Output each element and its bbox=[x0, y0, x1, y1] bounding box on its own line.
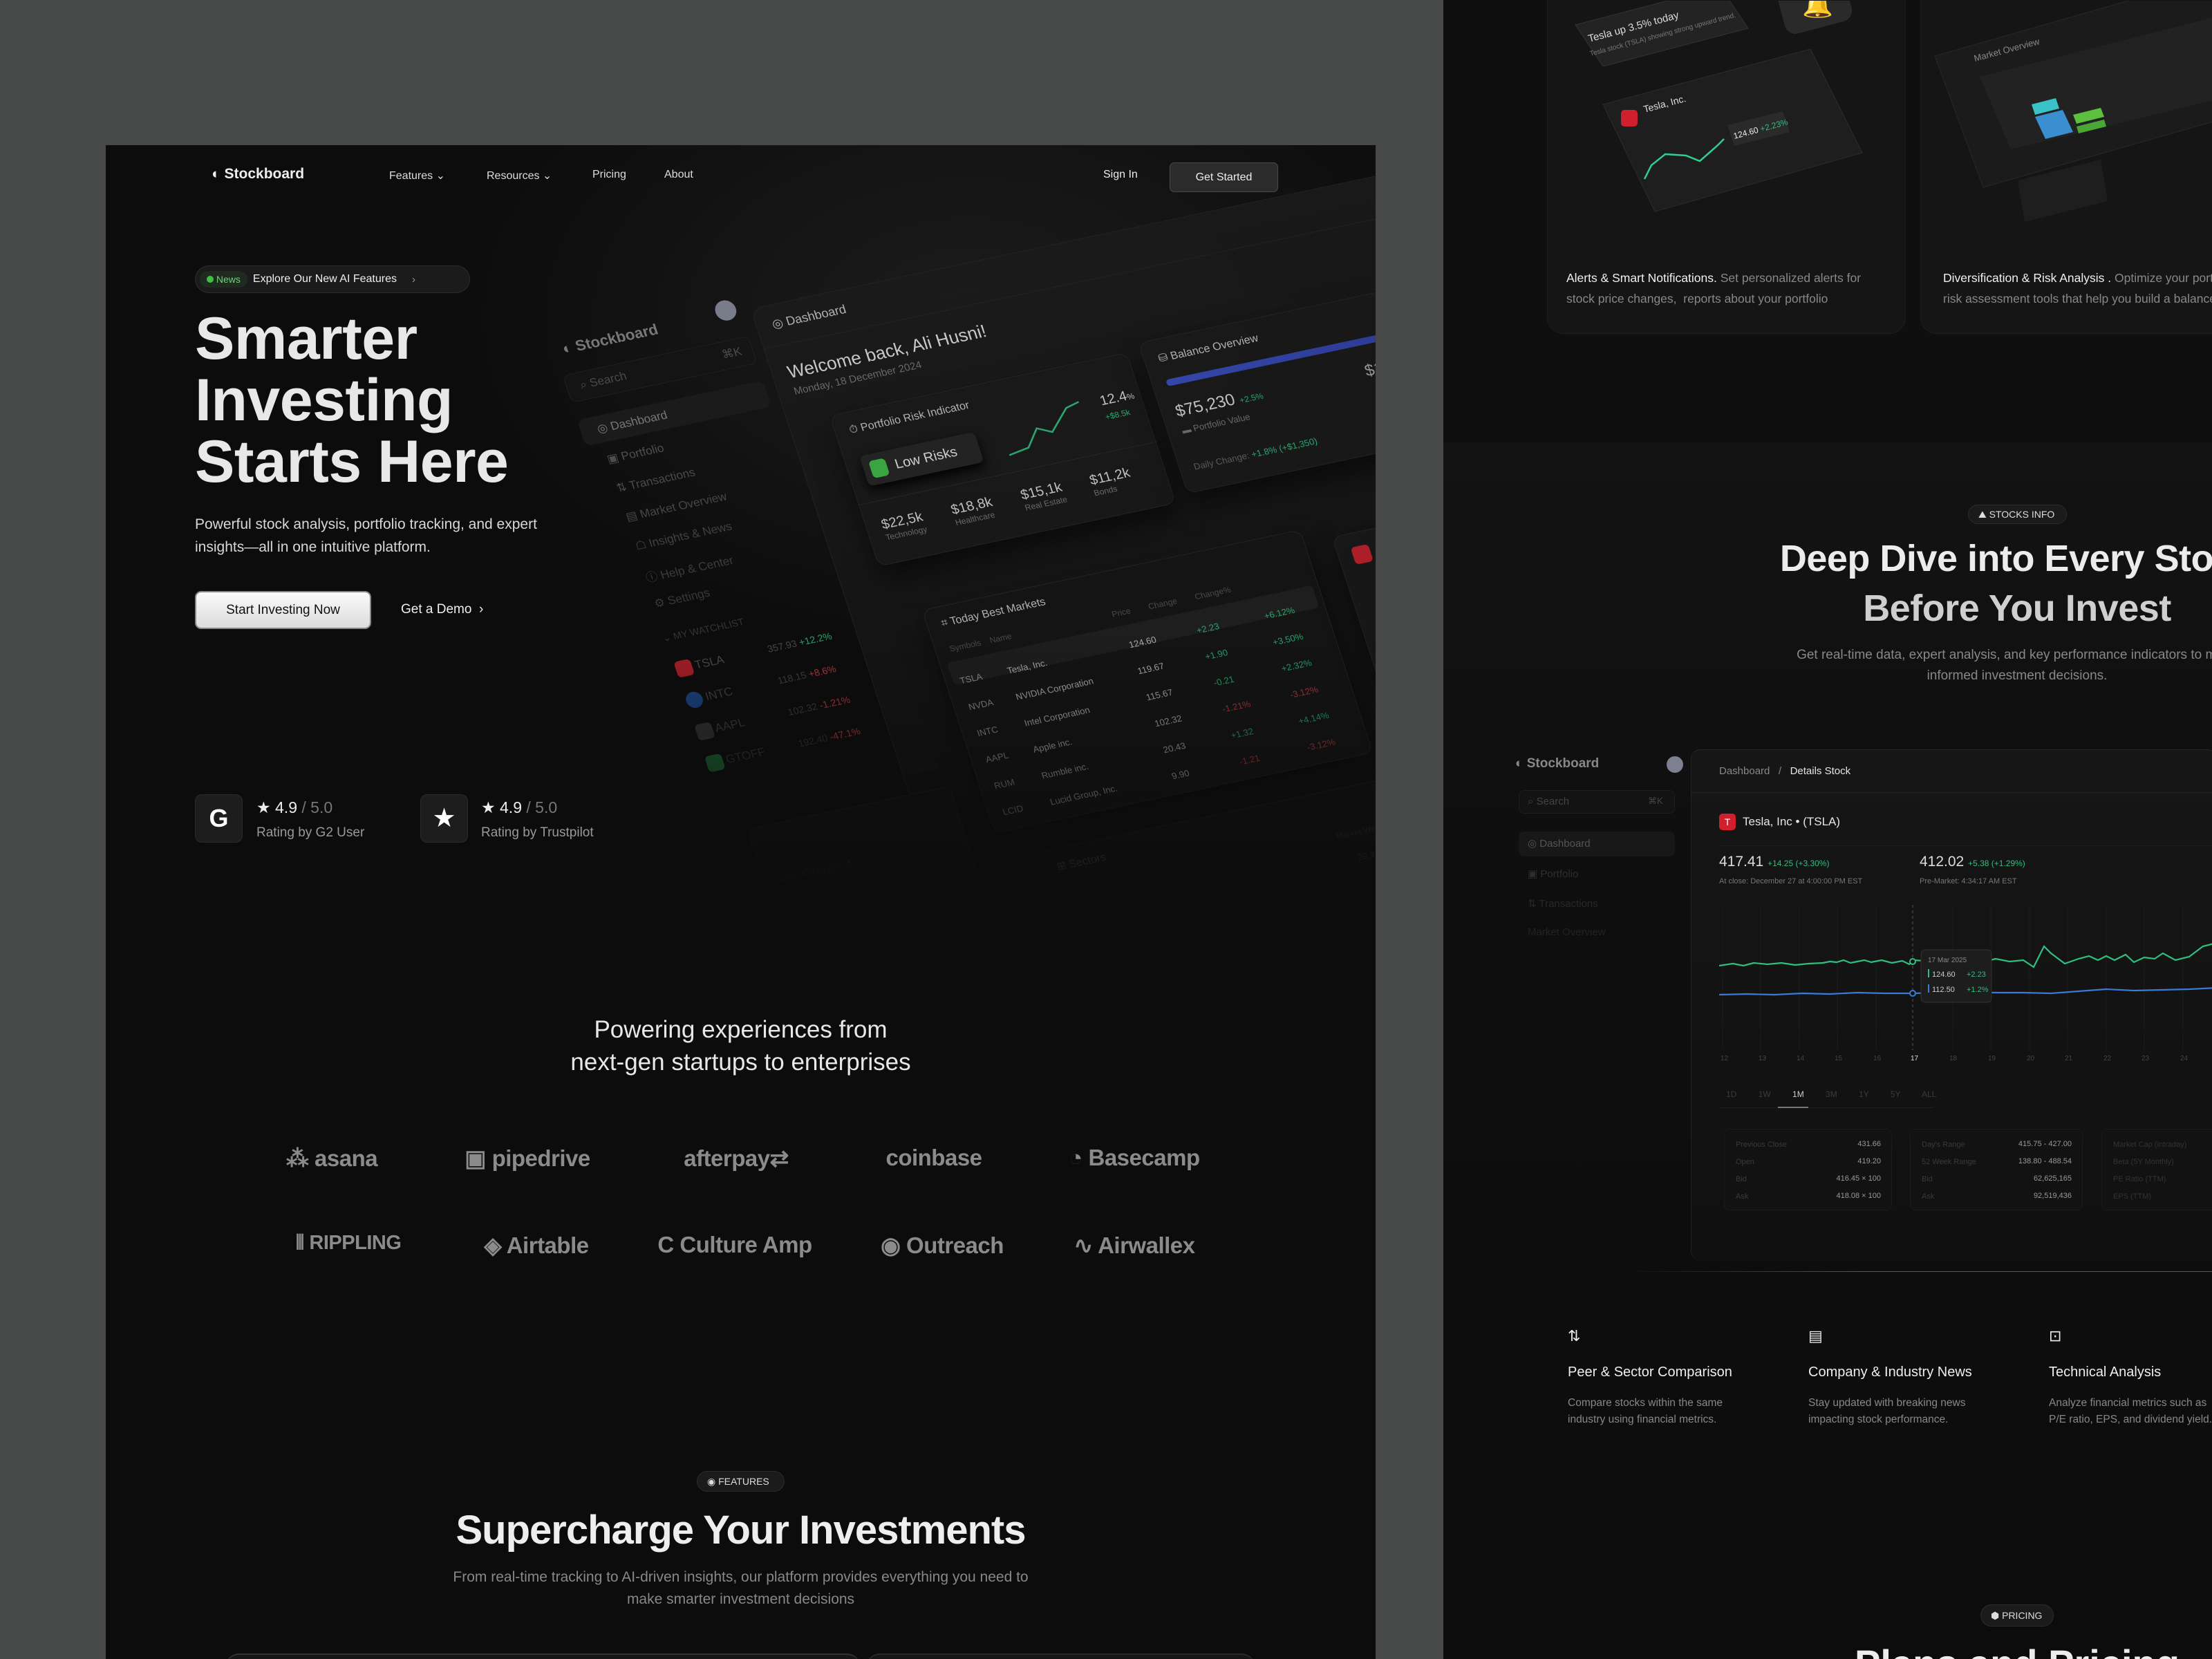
main panel: 92,519,436 bbox=[2034, 1192, 2072, 1200]
sidebar: ⌘K bbox=[720, 345, 743, 362]
nav bar: Get Started bbox=[1196, 171, 1252, 183]
today best markets: Intel Corporation bbox=[1023, 704, 1091, 729]
today best markets: +6.12% bbox=[1263, 605, 1296, 621]
line chart: 13 bbox=[1759, 1055, 1767, 1062]
line chart: 17 Mar 2025 bbox=[1928, 957, 1967, 964]
main panel: Beta (5Y Monthly) bbox=[2113, 1158, 2174, 1166]
sectors card: ⊞ Sectors bbox=[1056, 852, 1107, 873]
hero buttons bbox=[195, 591, 371, 629]
line chart: 24 bbox=[2180, 1055, 2188, 1062]
stock detail dashboard: ⇅ Transactions bbox=[1528, 898, 1598, 910]
feature columns: ▤ bbox=[1808, 1327, 1823, 1344]
main dashboard panel: Welcome back, Ali Husni! bbox=[785, 321, 989, 382]
stocks subtitle bbox=[1797, 648, 2212, 683]
sidebar: ⌄ MY WATCHLIST bbox=[661, 616, 745, 644]
sectors card: Sector bbox=[1065, 885, 1091, 899]
line chart bbox=[1719, 905, 2212, 1062]
today best markets: +3.50% bbox=[1271, 631, 1304, 648]
sidebar: 102.32 -1.21% bbox=[787, 694, 852, 718]
today best markets: +4.14% bbox=[1297, 710, 1330, 727]
logos: C Culture Amp bbox=[657, 1232, 812, 1257]
today best markets: NVDA bbox=[967, 697, 995, 712]
feature columns: ⇅ bbox=[1568, 1327, 1580, 1344]
powering heading: Powering experiences from bbox=[594, 1016, 888, 1043]
stocks info pill bbox=[1968, 505, 2067, 524]
sectors card: Technology bbox=[1072, 903, 1120, 923]
logos bbox=[286, 1145, 1200, 1258]
sidebar: ▤ Market Overview bbox=[624, 490, 729, 523]
stock detail dashboard: ⌕ Search bbox=[1528, 796, 1569, 807]
today best markets: +2.23 bbox=[1195, 621, 1221, 635]
main panel: Pre-Market: 4:34:17 AM EST bbox=[1920, 877, 2017, 885]
feature columns: Stay updated with breaking news bbox=[1808, 1397, 1965, 1409]
risk card: 12.4% bbox=[1098, 388, 1136, 409]
line chart: +2.23 bbox=[1967, 971, 1986, 979]
sidebar: INTC bbox=[704, 685, 734, 703]
main panel: Ask bbox=[1922, 1192, 1934, 1201]
hero subtitle bbox=[195, 516, 537, 555]
time tabs: 1D 1W 1M 3M 1Y 5Y ALL bbox=[1726, 1089, 1936, 1099]
illustration: notification + chart bbox=[1575, 1, 1862, 212]
sidebar: ◐ Stockboard bbox=[560, 321, 660, 357]
sidebar: 357.93 +12.2% bbox=[766, 630, 833, 655]
main panel: Market Cap (intraday) bbox=[2113, 1141, 2186, 1149]
feature cards tops bbox=[225, 1653, 861, 1659]
powering heading bbox=[570, 1016, 911, 1076]
today best markets: LCID bbox=[1002, 803, 1024, 817]
line chart: +1.2% bbox=[1967, 986, 1989, 994]
logos: ∿ Airwallex bbox=[1074, 1232, 1195, 1258]
features subtitle: make smarter investment decisions bbox=[627, 1591, 854, 1607]
line chart: 124.60 bbox=[1932, 971, 1956, 979]
feature columns: ⊡ bbox=[2049, 1327, 2061, 1344]
feature columns: impacting stock performance. bbox=[1808, 1414, 1948, 1425]
risk card: Low Risks bbox=[893, 444, 959, 472]
stock detail dashboard: ◎ Dashboard bbox=[1528, 838, 1591, 850]
feature columns: Technical Analysis bbox=[2049, 1365, 2161, 1380]
logos: ⁂ asana bbox=[286, 1145, 377, 1171]
main panel: Day's Range bbox=[1922, 1141, 1965, 1149]
feature columns: Company & Industry News bbox=[1808, 1365, 1972, 1380]
nav bar bbox=[212, 162, 1278, 192]
nav bar: Sign In bbox=[1103, 169, 1138, 180]
today best markets: 124.60 bbox=[1127, 635, 1158, 650]
card: diversification bbox=[1920, 0, 2212, 334]
risk card: $18,8k bbox=[949, 494, 995, 518]
line chart: 16 bbox=[1873, 1055, 1882, 1062]
powering heading: next-gen startups to enterprises bbox=[570, 1049, 911, 1076]
pricing pill bbox=[1980, 1604, 2054, 1627]
today best markets: +1.90 bbox=[1203, 647, 1229, 662]
sidebar: ⚙ Settings bbox=[653, 586, 711, 610]
today best markets: Price Change Change% bbox=[1110, 585, 1232, 619]
today best markets bbox=[921, 529, 1374, 834]
today best markets: TSLA bbox=[959, 671, 984, 686]
today best markets: 119.67 bbox=[1136, 661, 1165, 676]
ratings bbox=[195, 794, 594, 843]
sidebar: AAPL bbox=[713, 716, 747, 735]
today best markets: -3.12% bbox=[1306, 737, 1337, 753]
today best markets: -3.12% bbox=[1288, 684, 1320, 700]
stats boxes: Bid bbox=[1736, 1175, 1747, 1183]
stocks title: Before You Invest bbox=[1863, 588, 2171, 629]
risk card bbox=[830, 353, 1176, 567]
sidebar: 118.15 +8.6% bbox=[776, 663, 838, 686]
lower section bbox=[1443, 442, 2212, 1659]
card: diversification: Market Overview bbox=[1973, 36, 2041, 64]
balance card bbox=[1138, 256, 1593, 494]
balance card: Daily Change: +1.8% (+$1,350) bbox=[1192, 435, 1319, 472]
sidebar: 192.40 -47.1% bbox=[797, 725, 862, 749]
main panel: Bid bbox=[1922, 1175, 1933, 1183]
sidebar: ▣ Portfolio bbox=[606, 442, 666, 466]
today best markets: Tesla, Inc. bbox=[1006, 657, 1049, 676]
today best markets: Apple inc. bbox=[1031, 736, 1074, 755]
stocks title bbox=[1780, 538, 2212, 629]
stock detail dashboard: ▣ Portfolio bbox=[1528, 868, 1578, 880]
sidebar bbox=[560, 300, 862, 771]
features subtitle: From real-time tracking to AI-driven insights, our platform provides everything you need to bbox=[453, 1569, 1029, 1585]
sidebar: ☖ Insights & News bbox=[634, 520, 733, 552]
sectors card bbox=[1037, 752, 1540, 944]
panel: right page preview bbox=[1443, 0, 2212, 1659]
ratings: G bbox=[209, 804, 228, 832]
panel: left landing page: Get a Demo › bbox=[401, 602, 483, 617]
main panel bbox=[1691, 749, 2212, 1261]
feature columns: Analyze financial metrics such as bbox=[2049, 1397, 2206, 1409]
today best markets: 115.67 bbox=[1145, 687, 1174, 702]
main panel: EPS (TTM) bbox=[2113, 1192, 2151, 1201]
pricing pill: ⬢ PRICING bbox=[1991, 1609, 2042, 1620]
line chart: 23 bbox=[2141, 1055, 2150, 1062]
main panel: At close: December 27 at 4:00:00 PM EST bbox=[1719, 877, 1862, 885]
ratings: Rating by Trustpilot bbox=[481, 825, 594, 840]
main panel: 416.45 × 100 bbox=[1836, 1174, 1881, 1183]
features pill: ◉ FEATURES bbox=[707, 1475, 769, 1486]
today best markets: 20.43 bbox=[1162, 740, 1187, 755]
main panel: 138.80 - 488.54 bbox=[2018, 1157, 2072, 1165]
dashboard mockup (tilted) bbox=[560, 176, 1376, 923]
card text: Alerts & Smart Notifications. Set personalized alerts for stock price changes, reports about your portfolio bbox=[1566, 271, 1861, 306]
illustration: notification + chart: Tesla stock (TSLA) showing strong upward trend. bbox=[1589, 12, 1736, 58]
main dashboard panel: ◎ Dashboard bbox=[770, 302, 848, 331]
line chart: 112.50 bbox=[1932, 986, 1955, 994]
card: alerts bbox=[1547, 0, 1906, 334]
tesla card bbox=[1331, 465, 1734, 734]
hero buttons: Start Investing Now bbox=[226, 603, 340, 617]
main panel: 412.02 +5.38 (+1.29%) bbox=[1920, 854, 2025, 870]
logos: ◉ Outreach bbox=[881, 1232, 1004, 1258]
stock detail dashboard bbox=[1515, 749, 2212, 1260]
line chart: 15 bbox=[1835, 1055, 1843, 1062]
risk card: $11,2k bbox=[1087, 465, 1132, 488]
today best markets: Rumble inc. bbox=[1040, 761, 1089, 781]
hero subtitle: insights—all in one intuitive platform. bbox=[195, 539, 431, 555]
main panel: 415.75 - 427.00 bbox=[2018, 1140, 2072, 1148]
upgrade card bbox=[747, 786, 977, 915]
main panel: 431.66 bbox=[1857, 1140, 1881, 1148]
main panel: Tesla, Inc • (TSLA) bbox=[1743, 815, 1840, 828]
today best markets: -1.21 bbox=[1238, 753, 1262, 767]
nav bar: Pricing bbox=[592, 169, 626, 180]
divider line bbox=[1625, 1271, 2212, 1272]
today best markets: -1.21% bbox=[1221, 699, 1252, 714]
ratings: ★ bbox=[432, 804, 456, 833]
today best markets: +1.32 bbox=[1229, 726, 1255, 740]
line chart: 17 bbox=[1911, 1055, 1919, 1062]
hero headline: Starts Here bbox=[195, 429, 508, 495]
hero subtitle: Powerful stock analysis, portfolio tracking, and expert bbox=[195, 516, 537, 532]
line chart: 20 bbox=[2027, 1055, 2035, 1062]
risk card: $15,1k bbox=[1019, 480, 1064, 503]
logos: afterpay⇄ bbox=[684, 1145, 789, 1171]
feature columns bbox=[1568, 1327, 2212, 1425]
news pill: News bbox=[216, 274, 241, 285]
stats boxes bbox=[1724, 1129, 1892, 1210]
features title: Supercharge Your Investments bbox=[456, 1508, 1026, 1553]
main panel: 52 Week Range bbox=[1922, 1158, 1976, 1166]
logos: ▣ pipedrive bbox=[465, 1145, 590, 1171]
today best markets: INTC bbox=[975, 724, 1000, 738]
news pill: Explore Our New AI Features bbox=[253, 273, 397, 285]
sidebar: ⓘ Help & Center bbox=[644, 554, 735, 585]
main panel: 62,625,165 bbox=[2034, 1174, 2072, 1183]
today best markets: 9.90 bbox=[1170, 768, 1190, 781]
stats boxes: Previous Close bbox=[1736, 1141, 1787, 1149]
nav bar: About bbox=[664, 169, 693, 180]
stocks subtitle: informed investment decisions. bbox=[1927, 668, 2107, 683]
sidebar: GTOFF bbox=[724, 745, 767, 766]
sidebar: ⇅ Transactions bbox=[615, 466, 697, 495]
stock detail dashboard: ⌘K bbox=[1648, 796, 1663, 806]
risk card: Healthcare bbox=[954, 510, 996, 527]
today best markets: NVIDIA Corporation bbox=[1014, 676, 1095, 702]
hero headline: Investing bbox=[195, 367, 453, 433]
features subtitle bbox=[453, 1569, 1029, 1607]
panel: left landing page bbox=[106, 145, 1376, 1659]
today best markets: 102.32 bbox=[1153, 713, 1183, 729]
feature columns: Compare stocks within the same bbox=[1568, 1397, 1723, 1409]
today best markets: +2.32% bbox=[1280, 657, 1313, 674]
logos: ◔ Basecamp bbox=[1069, 1145, 1200, 1170]
today best markets: AAPL bbox=[984, 750, 1010, 765]
line chart: 21 bbox=[2065, 1055, 2073, 1062]
main panel: T bbox=[1725, 816, 1730, 827]
balance card: ▬ Portfolio Value bbox=[1181, 411, 1251, 435]
risk card: Technology bbox=[884, 524, 928, 542]
hero headline bbox=[195, 306, 508, 495]
top section bbox=[1443, 0, 2212, 442]
main dashboard panel bbox=[751, 122, 1844, 966]
ratings: ★ 4.9 / 5.0 bbox=[256, 798, 332, 816]
today best markets: -0.21 bbox=[1212, 674, 1235, 688]
logos: ⦀ RIPPLING bbox=[296, 1232, 401, 1254]
feature columns: Peer & Sector Comparison bbox=[1568, 1365, 1732, 1380]
line chart: 12 bbox=[1721, 1055, 1729, 1062]
main panel: Dashboard / Details Stock bbox=[1719, 765, 1850, 777]
main panel: PE Ratio (TTM) bbox=[2113, 1175, 2166, 1183]
ratings: Rating by G2 User bbox=[256, 825, 364, 840]
sidebar: ⌕ Search bbox=[578, 369, 628, 391]
feature columns: industry using financial metrics. bbox=[1568, 1414, 1716, 1425]
illustration: notification + chart: 124.60 +2.23% bbox=[1732, 117, 1789, 141]
fade overlay bbox=[106, 629, 1376, 906]
main panel: 417.41 +14.25 (+3.30%) bbox=[1719, 854, 1829, 870]
ratings: ★ 4.9 / 5.0 bbox=[481, 798, 557, 816]
sidebar: ◐ Stockboard bbox=[1515, 756, 1599, 771]
stats boxes: Ask bbox=[1736, 1192, 1748, 1201]
line chart: 19 bbox=[1988, 1055, 1996, 1062]
balance card: $75,230 +2.5% bbox=[1173, 391, 1264, 420]
line chart: 14 bbox=[1797, 1055, 1805, 1062]
main dashboard panel: Monday, 18 December 2024 bbox=[792, 359, 924, 397]
features pill bbox=[697, 1471, 785, 1492]
today best markets: Symbols Name bbox=[948, 631, 1013, 654]
stats boxes: Open bbox=[1736, 1158, 1754, 1166]
upgrade card: Upgrade to pro ↗ bbox=[776, 857, 853, 883]
feature columns: P/E ratio, EPS, and dividend yield. bbox=[2049, 1414, 2212, 1425]
main panel: 418.08 × 100 bbox=[1836, 1192, 1881, 1200]
risk card: $22,5k bbox=[879, 509, 925, 532]
news pill bbox=[195, 265, 470, 293]
risk card: +$8.5k bbox=[1104, 407, 1132, 422]
risk card: ⏱ Portfolio Risk Indicator bbox=[847, 400, 971, 436]
today best markets: ⌗ Today Best Markets bbox=[939, 596, 1047, 629]
balance card: ⛁ Balance Overview bbox=[1157, 332, 1259, 365]
nav bar: Features ⌄ bbox=[389, 170, 445, 182]
hero headline: Smarter bbox=[195, 306, 418, 372]
today best markets: Lucid Group, Inc. bbox=[1049, 783, 1119, 807]
risk card: Real Estate bbox=[1024, 494, 1069, 513]
today best markets: RUM bbox=[993, 777, 1016, 791]
sidebar: ◎ Dashboard bbox=[595, 409, 669, 435]
logos: ◈ Airtable bbox=[484, 1232, 589, 1258]
logos: coinbase bbox=[885, 1145, 982, 1170]
illustration: notification + chart: Tesla up 3.5% today bbox=[1587, 9, 1680, 45]
illustration: notification + chart: Tesla, Inc. bbox=[1642, 93, 1687, 115]
line chart: 18 bbox=[1949, 1055, 1958, 1062]
risk card: Bonds bbox=[1093, 484, 1118, 498]
line chart: 22 bbox=[2103, 1055, 2112, 1062]
sidebar: TSLA bbox=[693, 653, 726, 671]
main panel: 419.20 bbox=[1857, 1157, 1881, 1165]
news pill: › bbox=[412, 274, 415, 285]
stock detail dashboard: Market Overview bbox=[1528, 926, 1606, 938]
nav bar: ◐ Stockboard bbox=[212, 166, 304, 182]
stocks info pill: ⛰ STOCKS INFO bbox=[1978, 509, 2054, 520]
nav bar: Resources ⌄ bbox=[487, 170, 552, 182]
